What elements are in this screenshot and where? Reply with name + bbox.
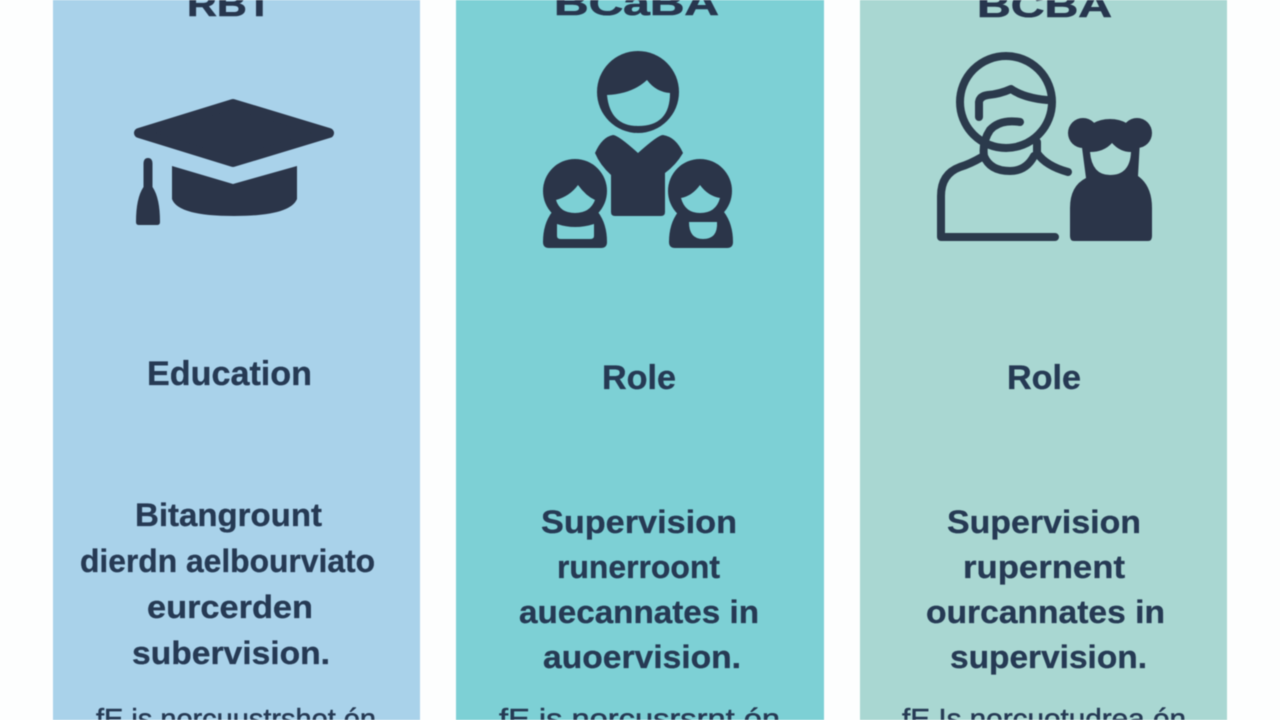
- text block: BCBA description: rupernent: [963, 549, 1125, 585]
- text block: RBT description: subervision.: [132, 635, 330, 671]
- label: Role: Role: [1007, 359, 1081, 397]
- panel: RBT: [53, 0, 420, 720]
- label: Role: Role: [602, 359, 676, 397]
- panel: BCBA: [860, 0, 1227, 720]
- icon: graduation cap: [136, 104, 329, 225]
- panel: BCaBA: [456, 0, 824, 720]
- text block: BCBA description: Supervision: [947, 504, 1141, 540]
- text block: BCaBA description: Supervision: [541, 504, 737, 540]
- text block: RBT description: Bitangrount: [135, 497, 322, 533]
- text block: BCaBA description: [519, 504, 759, 675]
- icon: adult with two children: [543, 51, 733, 248]
- text block: RBT description: dierdn aelbourviato: [80, 543, 375, 579]
- text block: BCBA description: [926, 504, 1165, 675]
- text block: RBT description: eurcerden: [147, 589, 313, 625]
- text block: BCaBA description: auoervision.: [543, 639, 741, 675]
- text block: BCBA description: supervision.: [950, 639, 1147, 675]
- text block: BCaBA description: runerroont: [557, 549, 720, 585]
- icon: supervisor with child: [941, 56, 1152, 241]
- text block: BCBA description: ourcannates in: [926, 594, 1165, 630]
- text block: BCaBA description: auecannates in: [519, 594, 759, 630]
- text block: RBT description: [80, 497, 375, 671]
- label: Education: Education: [147, 355, 312, 393]
